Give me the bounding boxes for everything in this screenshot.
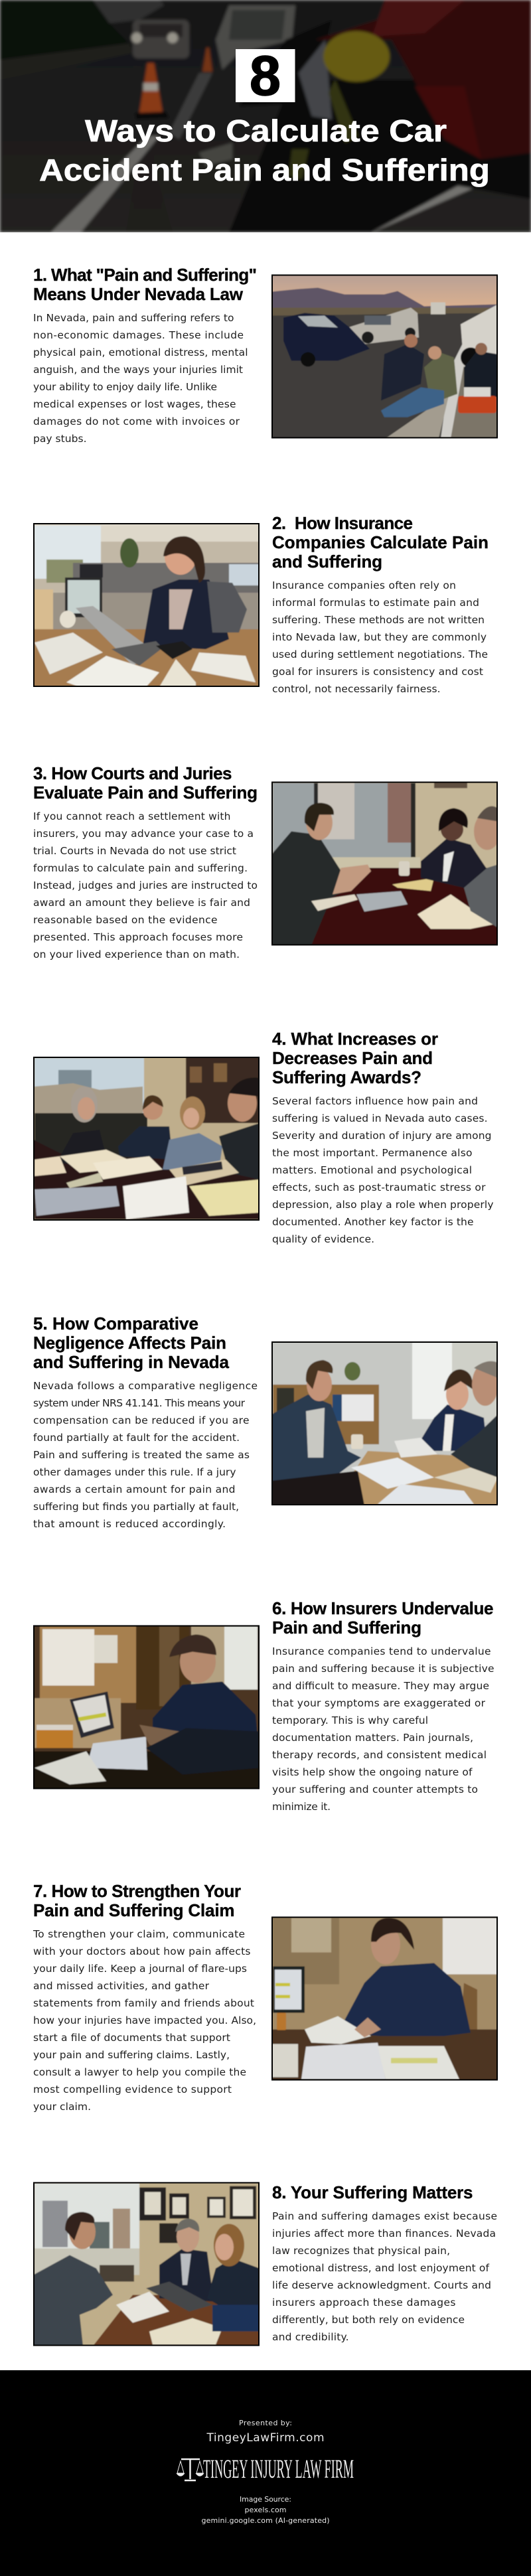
heading 6 xyxy=(272,1598,494,1637)
photo: woman writing in journal with binders xyxy=(271,1917,498,2080)
body text 6: visits help show the ongoing nature of xyxy=(272,1766,473,1778)
body text 1 xyxy=(33,312,248,445)
body text 2: suffering. These methods are not written xyxy=(272,614,485,626)
heading 4 xyxy=(272,1029,438,1087)
body text 4: Severity and duration of injury are among xyxy=(272,1130,491,1142)
heading 3: Evaluate Pain and Suffering xyxy=(33,783,258,802)
panel 6: how insurers undervalue xyxy=(33,1598,494,1813)
body text 4: suffering is valued in Nevada auto cases. xyxy=(272,1112,487,1124)
body text 6: pain and suffering because it is subjective xyxy=(272,1663,494,1675)
body text 4: documented. Another key factor is the xyxy=(272,1216,474,1228)
body text 8: injuries affect more than finances. Nevada xyxy=(272,2228,496,2239)
icon: scales of justice xyxy=(177,2459,203,2480)
heading 1: Means Under Nevada Law xyxy=(33,284,244,304)
image source credits: Image Source: xyxy=(240,2495,291,2504)
photo: man writing pain journal at home desk xyxy=(33,1625,260,1789)
hero banner xyxy=(0,0,531,232)
heading 2: Companies Calculate Pain xyxy=(272,532,489,552)
body text 2: informal formulas to estimate pain and xyxy=(272,597,479,609)
body text 5 xyxy=(33,1380,258,1530)
number badge: 8: 8 xyxy=(250,44,281,107)
body text 7: how your injuries have impacted you. Also, xyxy=(33,2014,256,2026)
body text 5: that amount is reduced accordingly. xyxy=(33,1518,226,1530)
body text 6 xyxy=(272,1645,494,1813)
body text 7: your pain and suffering claims. Lastly, xyxy=(33,2049,230,2061)
heading 4: Decreases Pain and xyxy=(272,1048,433,1068)
body text 1: non-economic damages. These include xyxy=(33,329,244,341)
body text 8: emotional distress, and lost enjoyment of xyxy=(272,2262,490,2274)
main title: Accident Pain and Suffering xyxy=(39,153,490,187)
body text 4 xyxy=(272,1095,494,1245)
body text 7: most compelling evidence to support xyxy=(33,2084,232,2095)
body text 1: your ability to enjoy daily life. Unlike xyxy=(33,381,217,393)
body text 2: Insurance companies often rely on xyxy=(272,579,456,591)
main title: Ways to Calculate Car xyxy=(85,114,447,148)
body text 2: control, not necessarily fairness. xyxy=(272,683,441,695)
body text 1: damages do not come with invoices or xyxy=(33,416,240,427)
body text 3: Instead, judges and juries are instructed to xyxy=(33,879,258,891)
body text 7 xyxy=(33,1928,256,2113)
footer panel xyxy=(0,2370,531,2576)
heading 6: 6. How Insurers Undervalue xyxy=(272,1598,494,1618)
photo: insurance adjuster at office desk xyxy=(33,523,260,687)
body text 7: with your doctors about how pain affects xyxy=(33,1945,251,1957)
body text 6: minimize it. xyxy=(272,1801,331,1813)
heading 5: Negligence Affects Pain xyxy=(33,1333,226,1353)
body text 4: matters. Emotional and psychological xyxy=(272,1164,472,1176)
body text 1: anguish, and the ways your injuries limit xyxy=(33,364,243,376)
body text 3: presented. This approach focuses more xyxy=(33,931,243,943)
body text 5: compensation can be reduced if you are xyxy=(33,1414,250,1426)
panel 3: how courts and juries evaluate xyxy=(33,763,500,960)
number badge: 8 xyxy=(236,44,295,107)
presented by credit xyxy=(206,2419,324,2445)
body text 1: pay stubs. xyxy=(33,433,86,445)
body text 2 xyxy=(272,579,488,695)
body text 2: used during settlement negotiations. The xyxy=(272,648,488,660)
body text 5: Pain and suffering is treated the same as xyxy=(33,1449,250,1461)
body text 1: physical pain, emotional distress, mental xyxy=(33,346,248,358)
body text 8: differently, but both rely on evidence xyxy=(272,2314,465,2326)
body text 3: formulas to calculate pain and suffering. xyxy=(33,862,248,874)
body text 1: medical expenses or lost wages, these xyxy=(33,398,236,410)
body text 7: your daily life. Keep a journal of flare-ups xyxy=(33,1963,247,1975)
body text 2: into Nevada law, but they are commonly xyxy=(272,631,487,643)
body text 4: effects, such as post-traumatic stress or xyxy=(272,1181,486,1193)
photo: family reviewing evidence with attorneys xyxy=(33,1057,260,1221)
main title xyxy=(39,114,490,187)
body text 8: insurers approach these damages xyxy=(272,2297,455,2309)
body text 3: trial. Courts in Nevada do not use strict xyxy=(33,845,236,857)
body text 7: To strengthen your claim, communicate xyxy=(33,1928,245,1940)
body text 4: Several factors influence how pain and xyxy=(272,1095,478,1107)
presented by credit: Presented by: xyxy=(239,2419,292,2427)
photo: client with attorneys at wooden table xyxy=(271,1341,498,1505)
panel 7: how to strengthen your claim xyxy=(33,1881,498,2113)
body text 6: Insurance companies tend to undervalue xyxy=(272,1645,491,1657)
photo: client meeting with attorneys at conference table xyxy=(271,782,498,945)
photo: roadside crash with officers helping injured driver xyxy=(271,275,498,438)
body text 7: statements from family and friends about xyxy=(33,1997,254,2009)
body text 3: insurers, you may advance your case to a xyxy=(33,828,254,840)
body text 7: consult a lawyer to help you compile the xyxy=(33,2066,246,2078)
body text 5: system under NRS 41.141. This means your xyxy=(33,1397,246,1409)
body text 6: that your symptoms are exaggerated or xyxy=(272,1697,486,1709)
body text 5: Nevada follows a comparative negligence xyxy=(33,1380,258,1392)
body text 6: and difficult to measure. They may argue xyxy=(272,1680,489,1692)
heading 8: 8. Your Suffering Matters xyxy=(272,2182,473,2202)
heading 4: Suffering Awards? xyxy=(272,1067,421,1087)
image source credits: pexels.com xyxy=(244,2506,287,2514)
heading 2: and Suffering xyxy=(272,552,382,571)
body text 3: on your lived experience than on math. xyxy=(33,948,240,960)
heading 7: Pain and Suffering Claim xyxy=(33,1900,235,1920)
body text 5: awards a certain amount for pain and xyxy=(33,1483,235,1495)
body text 8: and credibility. xyxy=(272,2331,349,2343)
heading 2: 2. How Insurance xyxy=(272,513,413,533)
heading 7 xyxy=(33,1881,241,1920)
body text 8 xyxy=(272,2210,497,2343)
body text 3: reasonable based on the evidence xyxy=(33,914,218,926)
body text 1: In Nevada, pain and suffering refers to xyxy=(33,312,234,324)
body text 5: found partially at fault for the accident. xyxy=(33,1432,240,1444)
heading 7: 7. How to Strengthen Your xyxy=(33,1881,241,1901)
heading 5: and Suffering in Nevada xyxy=(33,1352,230,1372)
body text 7: your claim. xyxy=(33,2101,91,2113)
photo: client meeting in law office with diplomas xyxy=(33,2182,260,2346)
body text 6: temporary. This is why careful xyxy=(272,1714,428,1726)
heading 1 xyxy=(33,265,257,304)
body text 4: depression, also play a role when properly xyxy=(272,1199,494,1211)
body text 6: therapy records, and consistent medical xyxy=(272,1749,487,1761)
panel 2: how insurance companies calculate xyxy=(33,513,489,695)
presented by credit: TingeyLawFirm.com xyxy=(206,2431,324,2445)
heading 4: 4. What Increases or xyxy=(272,1029,438,1049)
heading 3: 3. How Courts and Juries xyxy=(33,763,232,783)
body text 3: award an amount they believe is fair and xyxy=(33,897,250,909)
body text 7: start a file of documents that support xyxy=(33,2032,230,2044)
logo: Tingey Injury Law Firm with scales of justice xyxy=(177,2454,354,2484)
body text 5: suffering but finds you partially at fault, xyxy=(33,1501,239,1513)
heading 3 xyxy=(33,763,258,802)
image source credits: gemini.google.com (AI-generated) xyxy=(202,2516,329,2525)
body text 4: the most important. Permanence also xyxy=(272,1147,473,1159)
body text 3: If you cannot reach a settlement with xyxy=(33,810,231,822)
heading 6: Pain and Suffering xyxy=(272,1618,421,1637)
panel 8: your suffering matters xyxy=(33,2182,497,2346)
panel 4: what increases or decreases awards xyxy=(33,1029,494,1245)
heading 2 xyxy=(272,513,489,571)
body text 2: goal for insurers is consistency and cost xyxy=(272,666,483,678)
body text 3 xyxy=(33,810,258,960)
body text 8: life deserve acknowledgment. Courts and xyxy=(272,2279,491,2291)
body text 5: other damages under this rule. If a jury xyxy=(33,1466,236,1478)
image source credits xyxy=(202,2495,329,2525)
body text 8: law recognizes that physical pain, xyxy=(272,2245,450,2257)
panel 5: comparative negligence xyxy=(33,1314,498,1530)
body text 7: and missed activities, and gather xyxy=(33,1980,210,1992)
heading 5 xyxy=(33,1314,230,1372)
body text 8: Pain and suffering damages exist because xyxy=(272,2210,497,2222)
hero background photo: roadside accident at dusk xyxy=(0,0,531,232)
body text 6: documentation matters. Pain journals, xyxy=(272,1732,473,1744)
footer panel: TINGEY INJURY LAW FIRM xyxy=(203,2454,354,2484)
heading 1: 1. What "Pain and Suffering" xyxy=(33,265,257,285)
body text 4: quality of evidence. xyxy=(272,1233,374,1245)
body text 6: your suffering and counter attempts to xyxy=(272,1783,478,1795)
panel 1: what pain and suffering means xyxy=(33,265,498,445)
heading 5: 5. How Comparative xyxy=(33,1314,198,1333)
